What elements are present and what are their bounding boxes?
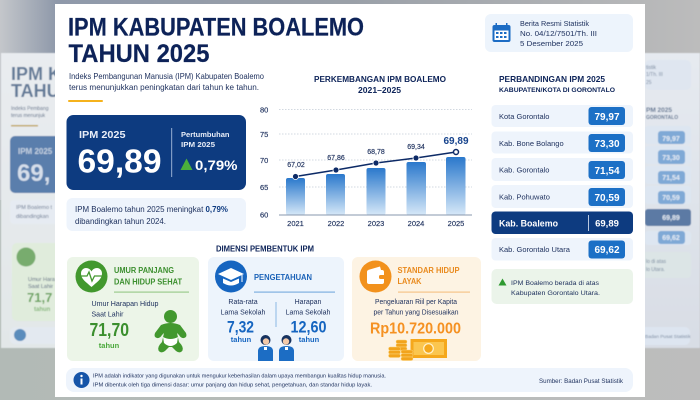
chart: IPM line and bars: 65 xyxy=(260,183,268,192)
text block: growth note: IPM Boalemo tahun 2025 meningkat 0,79% xyxy=(75,205,228,214)
panel: living standard xyxy=(352,257,481,361)
blurred backdrop: 70,59 xyxy=(662,195,680,202)
panel: IPM 2025 headline: IPM 2025 xyxy=(79,129,126,141)
callout: comparison note: IPM Boalemo berada di atas xyxy=(511,280,600,287)
blurred backdrop: TAHU xyxy=(11,81,60,101)
blurred backdrop: dibandingkan xyxy=(16,214,49,220)
footer note: Sumber: Badan Pusat Statistik xyxy=(539,378,624,385)
icon: info xyxy=(74,372,90,388)
chart: IPM line and bars: 2025 xyxy=(448,219,464,228)
blurred backdrop: tahun xyxy=(34,307,51,313)
chart: IPM line and bars: 2022 xyxy=(328,219,344,228)
icon: baby xyxy=(155,310,186,352)
panel: living standard: Pengeluaran Riil per Kapita xyxy=(375,299,457,306)
panel: health: tahun xyxy=(99,341,120,350)
chart heading xyxy=(314,75,446,95)
blurred backdrop: lo Utara. xyxy=(646,267,665,273)
panel: health: Umur Harapan Hidup xyxy=(92,301,159,308)
icon: students xyxy=(258,335,294,361)
panel: publication info: 5 Desember 2025 xyxy=(520,39,583,48)
subtitle xyxy=(69,72,265,92)
panel: education: tahun xyxy=(299,335,320,344)
blurred backdrop: tistik xyxy=(646,65,656,71)
blurred backdrop: lo di atas xyxy=(646,259,667,265)
blurred backdrop: 69,62 xyxy=(662,235,680,242)
panel: comparison ranking: Kota Gorontalo xyxy=(499,112,549,121)
accent rule xyxy=(68,100,103,102)
comparison heading: KABUPATEN/KOTA DI GORONTALO xyxy=(499,87,615,94)
blurred backdrop: Umur Hara xyxy=(28,277,56,283)
blurred backdrop: Badan Pusat Statistik xyxy=(645,334,691,340)
panel: living standard: STANDAR HIDUP xyxy=(398,266,460,275)
panel: comparison ranking: Kab. Gorontalo Utara xyxy=(499,245,571,254)
chart: IPM line and bars: 67,86 xyxy=(327,155,345,162)
text block: growth note: dibandingkan tahun 2024. xyxy=(75,217,166,226)
icon: growth triangle xyxy=(180,158,192,170)
blurred backdrop: terus menunjuk xyxy=(11,113,46,119)
panel: comparison ranking: Kab. Bone Bolango xyxy=(499,139,564,148)
panel: publication info: No. 04/12/7501/Th. III xyxy=(520,29,597,38)
chart heading: 2021–2025 xyxy=(358,86,402,95)
panel: publication info: Berita Resmi Statistik xyxy=(520,19,589,28)
blurred backdrop: 69,89 xyxy=(662,215,680,222)
panel: education: 12,60 xyxy=(290,318,326,336)
blurred backdrop: 71,7 xyxy=(27,290,52,305)
chart: IPM line and bars: 2021 xyxy=(287,219,304,228)
blurred backdrop: PM 2025 xyxy=(646,107,672,114)
callout: comparison note: Kabupaten Gorontalo Utara. xyxy=(511,290,600,297)
panel: education: 7,32 xyxy=(227,318,254,336)
blurred backdrop: Saat Lahir xyxy=(28,284,53,290)
panel: IPM 2025 headline xyxy=(66,115,246,190)
panel: education xyxy=(208,257,344,361)
panel: comparison ranking: 79,97 xyxy=(594,112,620,123)
panel: comparison ranking: Kab. Pohuwato xyxy=(499,192,550,202)
panel: health xyxy=(67,257,199,361)
panel: health: Saat Lahir xyxy=(92,312,124,318)
panel: publication info xyxy=(485,14,633,52)
highlighted row: Kab. Boalemo: Kab. Boalemo xyxy=(499,218,558,228)
panel: comparison ranking: 69,62 xyxy=(594,245,620,256)
blurred backdrop: IPM Boalemo t xyxy=(16,205,53,211)
panel: education: tahun xyxy=(231,335,252,344)
panel: comparison ranking: 70,59 xyxy=(594,193,620,204)
chart: IPM line and bars: 2024 xyxy=(408,219,424,228)
blurred backdrop: 71,54 xyxy=(662,175,680,182)
chart: IPM line and bars: 80 xyxy=(260,106,268,114)
chart heading: PERKEMBANGAN IPM BOALEMO xyxy=(314,75,446,84)
footer note: IPM adalah indikator yang digunakan untuk mengukur keberhasilan dalam upaya membangun kualitas hidup manusia. xyxy=(93,374,386,380)
subtitle: Indeks Pembangunan Manusia (IPM) Kabupaten Boalemo xyxy=(69,72,265,81)
panel: living standard: Rp10.720.000 xyxy=(370,320,461,338)
callout: comparison note xyxy=(492,269,633,304)
title: TAHUN 2025 xyxy=(68,40,210,68)
icon: money xyxy=(388,339,447,360)
text block: growth note xyxy=(66,198,246,231)
panel: education: Lama Sekolah xyxy=(286,310,330,316)
blurred backdrop: 79,97 xyxy=(662,136,680,143)
blurred backdrop: 25 xyxy=(646,80,652,86)
chart: IPM line and bars: 60 xyxy=(260,210,268,220)
chart: IPM line and bars: 2023 xyxy=(368,219,384,228)
footer note: IPM dibentuk oleh tiga dimensi dasar: umur panjang dan hidup sehat, pengetahuan, dan standar hidup layak. xyxy=(93,382,372,388)
chart: IPM line and bars: 69,34 xyxy=(407,144,425,151)
panel: health: DAN HIDUP SEHAT xyxy=(114,278,182,286)
panel: comparison ranking xyxy=(492,105,633,260)
chart: IPM line and bars: 70 xyxy=(260,156,268,165)
blurred backdrop: IPM K xyxy=(11,64,61,84)
blurred backdrop: 73,30 xyxy=(662,155,680,162)
panel: education: Rata-rata xyxy=(228,299,258,306)
panel: living standard: per Tahun yang Disesuaikan xyxy=(374,310,459,316)
chart: IPM line and bars: 75 xyxy=(260,130,268,139)
highlighted row: Kab. Boalemo: 69,89 xyxy=(595,218,619,230)
title: IPM KABUPATEN BOALEMO xyxy=(68,14,364,42)
highlighted row: Kab. Boalemo xyxy=(492,212,633,234)
panel: comparison ranking: 73,30 xyxy=(594,139,620,150)
panel: IPM 2025 headline: IPM 2025 xyxy=(181,140,215,149)
panel: living standard: LAYAK xyxy=(398,277,422,286)
blurred backdrop: IPM 2025 xyxy=(18,147,53,156)
icon: wallet xyxy=(360,260,392,292)
comparison heading xyxy=(499,74,615,94)
blurred backdrop: 69, xyxy=(17,160,50,187)
chart: IPM line and bars: 69,89 xyxy=(443,136,469,147)
panel: education: Lama Sekolah xyxy=(221,310,265,316)
chart: IPM line and bars: 68,78 xyxy=(367,149,385,156)
blurred backdrop: GORONTALO xyxy=(646,115,678,121)
panel: comparison ranking: Kab. Gorontalo xyxy=(499,166,549,174)
panel: health: UMUR PANJANG xyxy=(114,266,174,275)
comparison heading: PERBANDINGAN IPM 2025 xyxy=(499,74,605,84)
panel: education: PENGETAHUAN xyxy=(254,273,312,282)
panel: IPM 2025 headline: 69,89 xyxy=(78,142,162,180)
title xyxy=(68,14,364,68)
icon: heart xyxy=(76,260,108,292)
panel: IPM 2025 headline: 0,79% xyxy=(195,157,238,173)
icon: graduation cap xyxy=(215,260,247,292)
icon: calendar xyxy=(492,23,510,42)
blurred backdrop: Indeks Pembang xyxy=(11,106,49,112)
chart: IPM line and bars: 67,02 xyxy=(287,162,305,169)
blurred backdrop: 1/Th. III xyxy=(646,72,663,78)
panel: comparison ranking: 71,54 xyxy=(594,166,620,177)
panel: education: Harapan xyxy=(295,299,322,306)
panel: IPM 2025 headline: Pertumbuhan xyxy=(181,130,230,139)
chart: IPM line and bars xyxy=(260,106,472,228)
panel: health: 71,70 xyxy=(90,320,129,340)
subtitle: terus menunjukkan peningkatan dari tahun ke tahun. xyxy=(69,83,259,92)
footer note xyxy=(66,368,633,392)
dimensions heading: DIMENSI PEMBENTUK IPM xyxy=(216,244,314,254)
